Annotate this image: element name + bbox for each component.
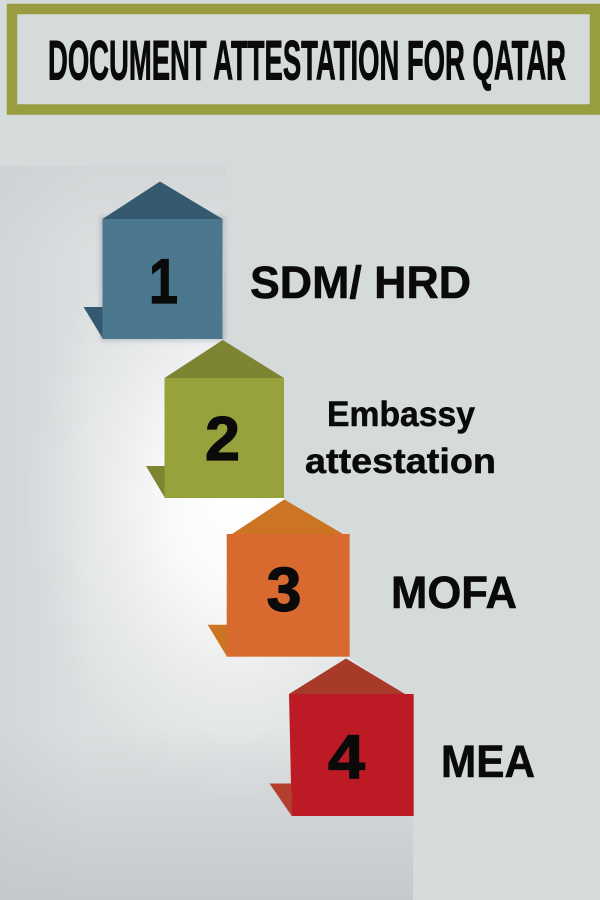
step 1 box [102,219,222,339]
step 2 roof [164,340,284,378]
label line: Embassy: Embassy [327,395,476,434]
step 3 roof [232,500,343,534]
step 3 box [227,534,350,657]
step 1 tab [84,307,103,339]
step 4 tab [270,784,292,816]
step 4 number: 4 [328,723,366,792]
step 3 label: MOFA [391,567,517,618]
title banner [12,9,595,110]
step 4 box [289,694,414,816]
step 1 number: 1 [149,247,178,317]
step 1: SDM/ HRD [84,182,471,341]
step 1 shadow [100,216,225,341]
step 4: MEA [270,658,535,816]
step 2 label [305,395,496,481]
title frame [12,9,595,110]
step 2 box [164,378,284,498]
step 3: MOFA [208,500,517,657]
step 2: Embassy attestation [146,340,496,498]
step 4 roof [289,658,405,694]
step 2 tab [146,466,165,498]
step 3 tab [208,625,227,657]
step 2 number: 2 [205,405,240,474]
step 4 label: MEA [441,736,535,787]
label line: attestation: attestation [305,442,496,481]
step 3 number: 3 [266,556,302,625]
step 1 label: SDM/ HRD [250,257,471,308]
step 1 roof [102,182,222,219]
stepped background panel [0,239,413,900]
